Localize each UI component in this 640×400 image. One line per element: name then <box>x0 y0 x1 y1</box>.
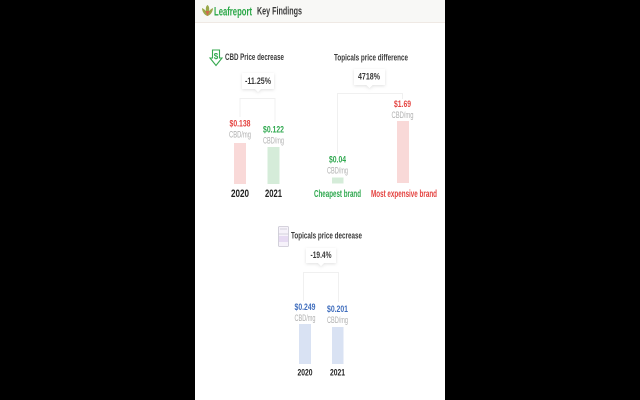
callout: 4718% <box>358 72 380 82</box>
bar most expensive brand: $1.69 <box>394 99 411 110</box>
icon: logo leaf <box>202 5 213 16</box>
callout: -11.25% <box>245 76 271 87</box>
logo wordmark: Leafreport <box>214 4 252 18</box>
panel: topicals price decrease <box>278 226 362 378</box>
bar 2021: $0.201 <box>327 304 349 315</box>
heading: CBD Price decrease <box>225 52 284 63</box>
bar 2021: CBD/mg <box>327 315 348 325</box>
bar cheapest brand: Cheapest brand <box>314 189 361 200</box>
callout <box>354 69 385 88</box>
bar 2020: $0.249 <box>294 302 316 313</box>
callout: -19.4% <box>310 250 332 261</box>
bar 2021 <box>263 124 284 200</box>
bracket <box>240 98 275 122</box>
bar 2021: CBD/mg <box>263 136 284 146</box>
bar most expensive brand: CBD/mg <box>392 110 414 120</box>
heading: Topicals price difference <box>334 52 408 64</box>
bar 2020: 2020 <box>231 188 249 200</box>
callout <box>242 73 274 92</box>
bar 2021: $0.122 <box>263 124 284 136</box>
panel: CBD price decrease <box>210 50 284 200</box>
bar 2021: 2021 <box>330 368 346 378</box>
panel: topicals price difference <box>314 52 437 200</box>
bar 2020: CBD/mg <box>229 130 251 140</box>
icon: topicals jar <box>278 226 288 246</box>
bar 2020 <box>229 118 251 200</box>
bar 2020: 2020 <box>298 368 312 378</box>
icon: dollar down arrow <box>210 50 222 66</box>
page panel <box>195 0 445 400</box>
bar cheapest brand: CBD/mg <box>327 166 348 176</box>
bar most expensive brand: Most expensive brand <box>371 189 437 200</box>
bar 2020: $0.138 <box>230 118 250 130</box>
bracket <box>304 272 338 302</box>
icon: dollar down arrow: $ <box>214 52 219 61</box>
bar 2021 <box>327 304 349 378</box>
bar cheapest brand: $0.04 <box>329 154 347 166</box>
bar 2020 <box>294 302 316 378</box>
bar 2020: CBD/mg <box>294 313 316 323</box>
heading: Topicals price decrease <box>291 230 362 242</box>
bracket <box>338 94 402 154</box>
header <box>195 0 445 23</box>
page title: Key Findings <box>257 6 302 18</box>
bar most expensive brand <box>371 99 437 200</box>
bar cheapest brand <box>314 154 361 200</box>
callout <box>306 248 336 266</box>
bar 2021: 2021 <box>265 188 282 200</box>
